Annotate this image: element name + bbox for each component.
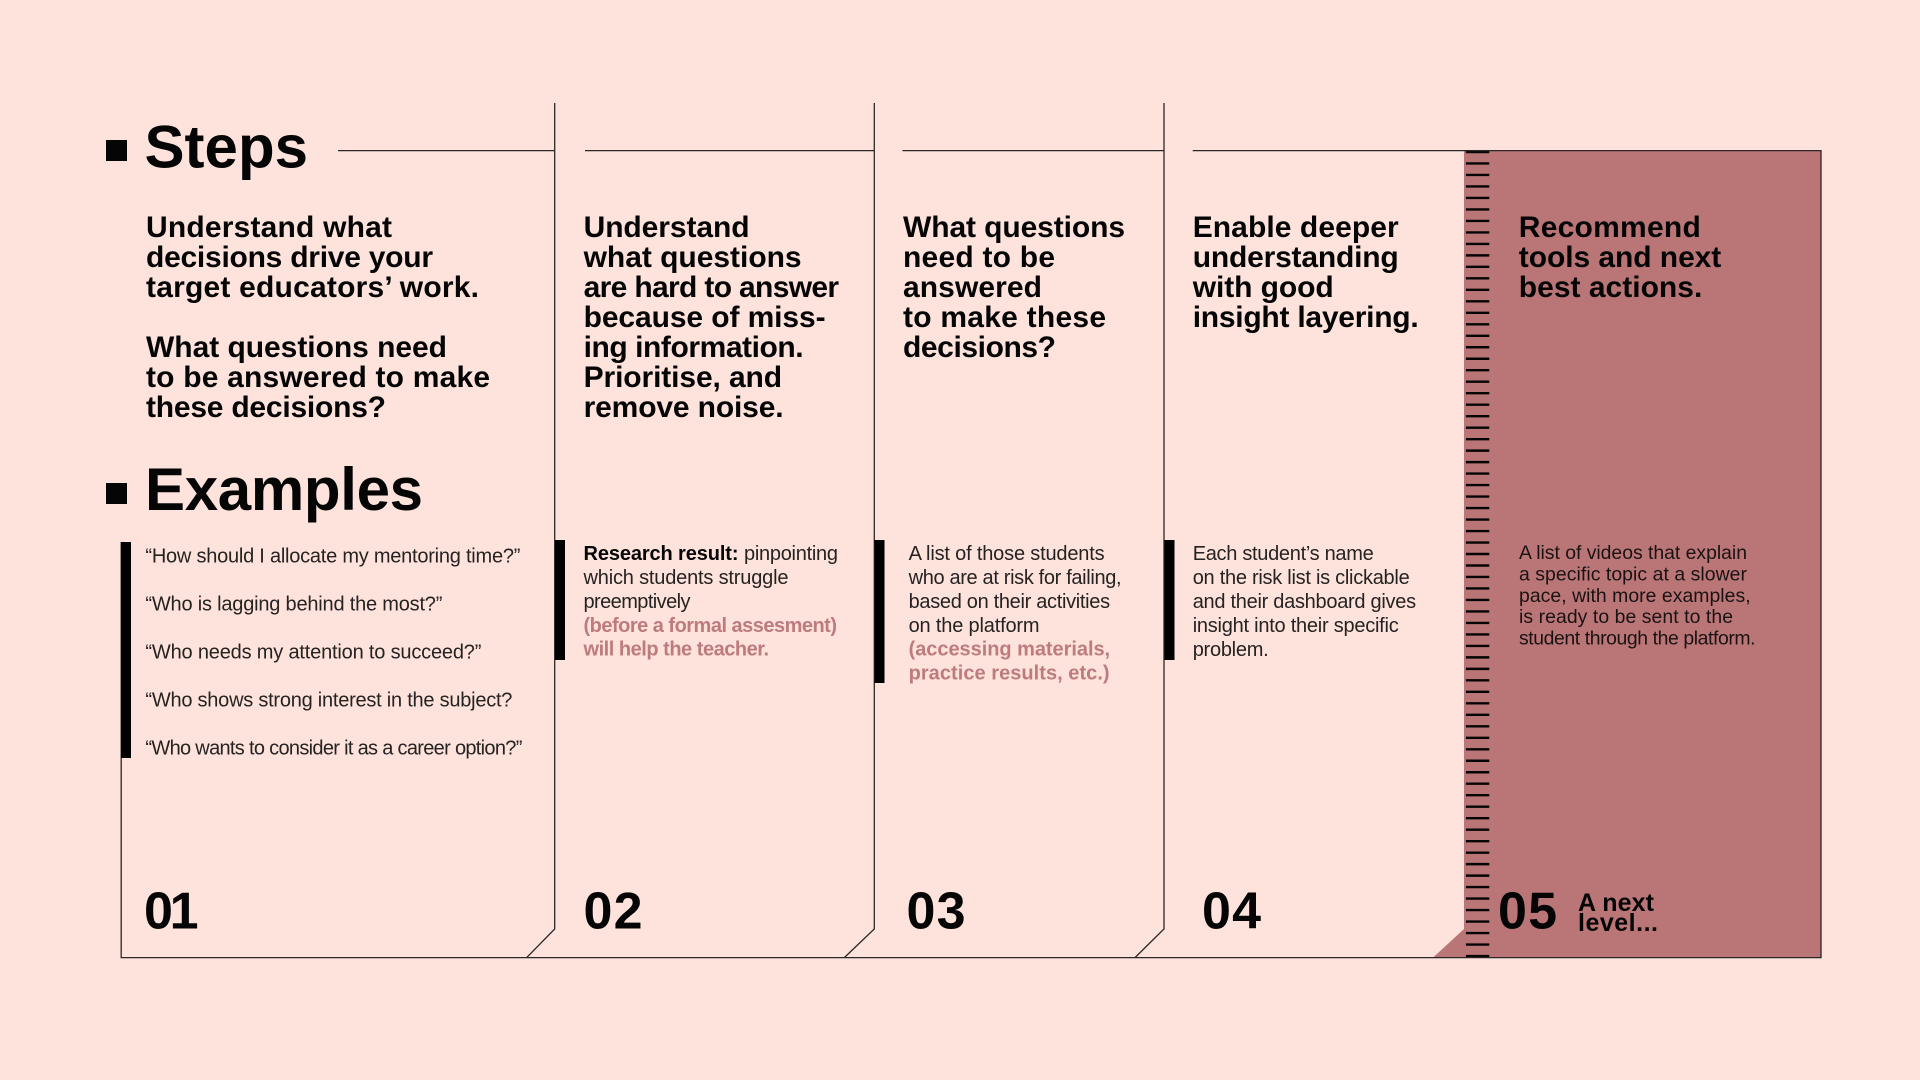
text block: step 02 example: pinpointing [744,543,838,565]
panel: step 05 rose background [1433,151,1821,958]
panel: step 02 [555,211,839,940]
frame: column rules and outline [121,103,1821,958]
text block: step 02 description: Understand [584,211,750,244]
text block: step 02 description: what questions [583,241,802,274]
text block: step 01 example questions: “How should I allocate my mentoring time?” [145,545,520,567]
text block: step 01 example questions: “Who needs my attention to succeed?” [145,641,481,663]
text block: step 01 description: decisions drive your [146,241,433,274]
text block: step 05 description: tools and next [1519,241,1721,274]
text block: step 01 example questions: “Who wants to consider it as a career option?” [145,737,522,759]
number: 04: 04 [1202,882,1261,940]
text block: step 05 example: pace, with more examples, [1519,585,1751,607]
text block: step 02 example: which students struggle [582,567,788,589]
marker bar: step 03 [874,540,884,683]
text block: step 05 description: Recommend [1519,211,1701,244]
text block: step 01 description: What questions need [146,331,447,364]
text block: step 03 description: to make these [903,301,1106,334]
text block: step 05 example: student through the platform. [1519,628,1756,650]
text block: step 03 description: answered [903,271,1042,304]
text block: step 02 example [582,543,838,660]
text block: step 02 description: are hard to answer [584,271,839,304]
text block: step 03 description: need to be [903,241,1055,274]
text block: step 04 example: on the risk list is clickable [1193,567,1410,589]
panel: step 03 [874,211,1125,940]
number: 01: 01 [144,882,198,940]
text block: step 02 description: remove noise. [584,391,784,424]
number: 03: 03 [906,882,966,940]
text block: step 03 example: on the platform [909,615,1040,637]
number: 05: 05 [1498,882,1557,940]
text block: step 03 description: What questions [903,211,1125,244]
marker bar: step 01 [121,542,131,758]
text block: step 01 example questions: “Who is lagging behind the most?” [145,593,442,615]
text block: step 04 description: insight layering. [1193,301,1419,334]
panel: step 04 [1164,211,1419,940]
panel: step 01 [106,114,522,940]
text block: step 03 example: A list of those students [909,543,1105,565]
text block: step 03 example: based on their activities [909,591,1110,613]
text block: step 01 example questions [145,545,522,759]
text block: step 05 example: A list of videos that explain [1519,542,1747,564]
callout: A next level: A next [1578,889,1655,917]
text block: step 05 description [1519,211,1721,304]
number: 02: 02 [584,882,642,940]
text block: step 03 example: who are at risk for failing, [908,567,1122,589]
text block: step 02 description: Prioritise, and [584,361,782,394]
text block: step 03 description: decisions? [903,331,1056,364]
heading: Examples: Examples [145,456,423,523]
marker bar: step 02 [555,540,565,660]
text block: step 01 description: to be answered to make [146,361,490,394]
text block: step 03 example [908,543,1122,684]
text block: step 02 example: will help the teacher. [582,638,769,660]
text block: step 02 example: Research result: [584,543,738,565]
text block: step 03 example: practice results, etc.) [909,662,1110,684]
text block: step 04 example: and their dashboard gives [1193,591,1416,613]
text block: step 02 example: (before a formal assesment) [584,615,837,637]
text block: step 02 description: ing information. [584,331,804,364]
text block: step 02 example: preemptively [584,591,690,613]
text block: step 05 description: best actions. [1519,271,1702,304]
text block: step 04 description [1192,211,1419,334]
text block: step 05 example: is ready to be sent to the [1519,606,1733,628]
text block: step 03 example: (accessing materials, [909,638,1110,660]
text block: step 05 example: a specific topic at a slower [1519,563,1748,585]
text block: step 01 example questions: “Who shows strong interest in the subject? [145,689,512,711]
text block: step 04 example [1193,543,1416,661]
heading: Steps: Steps [144,114,308,180]
text block: step 04 example: problem. [1193,639,1269,661]
panel: step 05 content [1498,211,1756,940]
callout: A next level: level... [1578,909,1658,937]
text block: step 01 description: these decisions? [146,391,386,424]
text block: step 01 description: target educators’ work. [146,271,479,304]
callout: A next level [1578,889,1658,937]
text block: step 02 description [583,211,839,424]
text block: step 04 description: Enable deeper [1193,211,1399,244]
text block: step 02 description: because of miss- [584,301,826,334]
text block: step 01 description [146,211,490,424]
text block: step 04 example: insight into their specific [1193,615,1399,637]
text block: step 04 description: with good [1192,271,1334,304]
text block: step 04 description: understanding [1193,241,1399,274]
text block: step 03 description [903,211,1125,364]
text block: step 01 description: Understand what [146,211,392,244]
text block: step 04 example: Each student’s name [1193,543,1374,565]
marker bar: step 04 [1164,540,1174,660]
text block: step 05 example [1519,542,1756,650]
